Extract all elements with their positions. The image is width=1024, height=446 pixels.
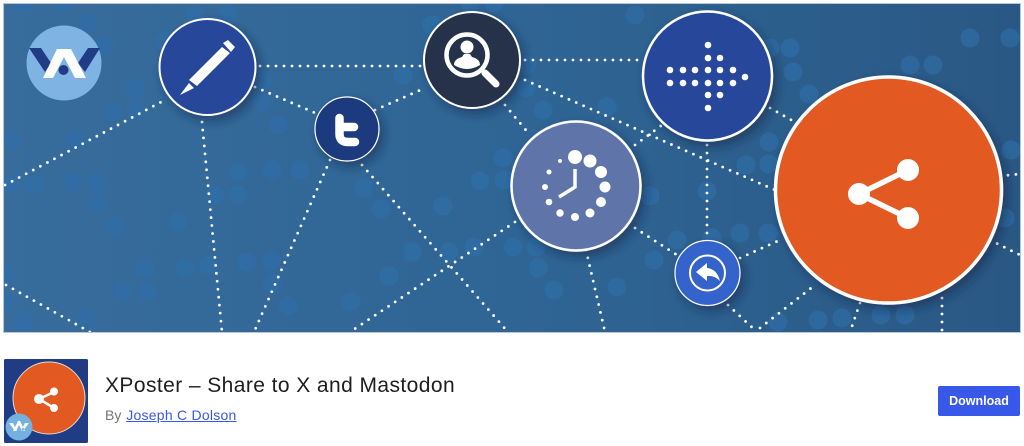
plugin icon	[4, 359, 88, 443]
icon: share circle	[776, 77, 1002, 303]
logo badge	[26, 26, 102, 100]
icon: reply circle	[675, 240, 740, 306]
background bubbles	[0, 0, 1020, 332]
icon: twitter circle	[315, 97, 379, 161]
download button	[938, 386, 1020, 416]
icon: pencil circle	[160, 19, 256, 115]
banner illustration	[3, 3, 1021, 333]
plugin title: XPoster – Share to X and Mastodon	[105, 374, 455, 397]
icon: clock circle	[512, 122, 640, 250]
icon: search user circle	[424, 12, 520, 108]
author line: By Joseph C Dolson	[105, 407, 237, 423]
dotted network lines	[5, 60, 1020, 332]
icon: dotted arrow circle	[643, 12, 772, 140]
download button: Download	[949, 394, 1009, 408]
banner background	[4, 4, 1020, 332]
